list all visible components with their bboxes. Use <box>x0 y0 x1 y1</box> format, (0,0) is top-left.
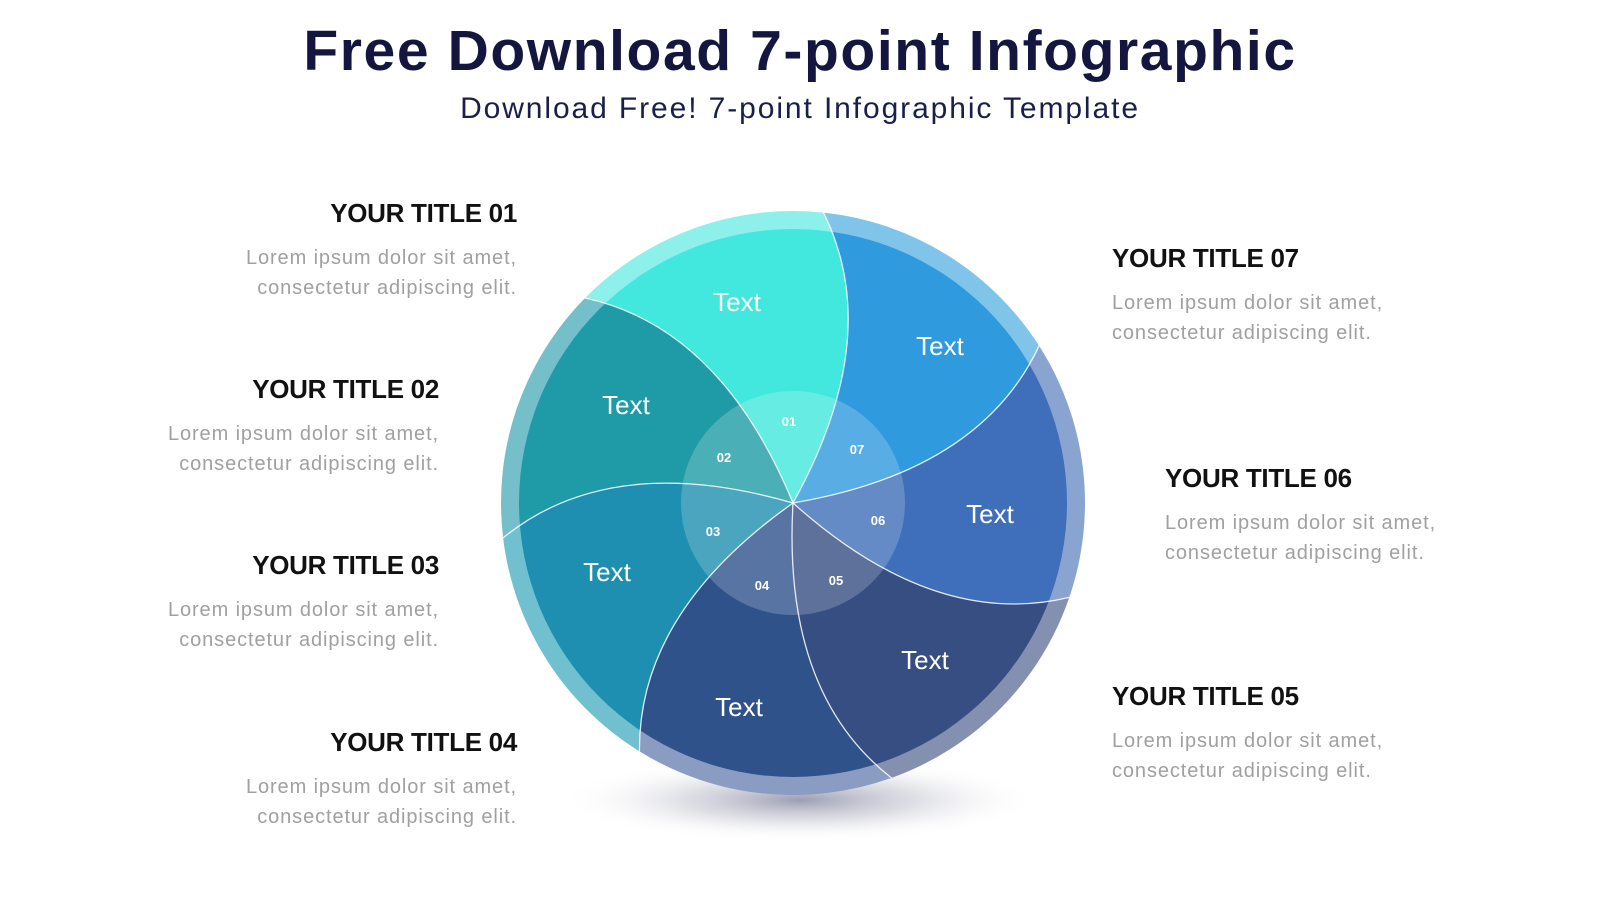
text block: title 02: Lorem ipsum dolor sit amet, <box>168 423 439 445</box>
segment labels: Text <box>713 287 762 317</box>
text block: title 04 <box>246 727 518 828</box>
segment numbers: 01 <box>782 414 796 429</box>
segment 01 <box>606 229 848 502</box>
text block: title 04: YOUR TITLE 04 <box>330 727 517 757</box>
text block: title 02 <box>168 374 439 475</box>
segment numbers: 06 <box>871 513 885 528</box>
text block: title 07: consectetur adipiscing elit. <box>1112 322 1372 344</box>
text block: title 05: Lorem ipsum dolor sit amet, <box>1112 730 1383 752</box>
subtitle: Download Free! 7-point Infographic Template <box>460 92 1140 125</box>
segment labels: Text <box>583 557 632 587</box>
segment 04 <box>640 504 876 777</box>
text block: title 06: consectetur adipiscing elit. <box>1165 542 1425 564</box>
rim segments <box>501 211 1085 795</box>
text block: title 03: Lorem ipsum dolor sit amet, <box>168 599 439 621</box>
segment labels: Text <box>602 390 651 420</box>
shadow <box>560 758 1040 842</box>
text block: title 07 <box>1112 243 1383 344</box>
segment 03 <box>520 483 792 730</box>
segment numbers: 04 <box>755 578 770 593</box>
main segments <box>519 229 1067 777</box>
text block: title 05: YOUR TITLE 05 <box>1112 681 1299 711</box>
segment labels: Text <box>966 499 1015 529</box>
boundary lines <box>503 213 1069 778</box>
segment 02 <box>519 304 792 525</box>
segment numbers <box>706 414 885 593</box>
inner circle overlay <box>681 391 905 615</box>
segment labels <box>583 287 1015 722</box>
segment numbers: 02 <box>717 450 731 465</box>
segment labels: Text <box>901 645 950 675</box>
text block: title 05 <box>1112 681 1383 782</box>
segment 07 <box>794 232 1029 502</box>
text block: title 02: consectetur adipiscing elit. <box>179 453 439 475</box>
text block: title 07: YOUR TITLE 07 <box>1112 243 1299 273</box>
text block: title 04: Lorem ipsum dolor sit amet, <box>246 776 517 798</box>
text block: title 07: Lorem ipsum dolor sit amet, <box>1112 292 1383 314</box>
text block: title 06 <box>1165 463 1436 564</box>
segment numbers: 05 <box>829 573 843 588</box>
title: Free Download 7-point Infographic <box>303 19 1297 83</box>
text block: title 03: YOUR TITLE 03 <box>252 550 439 580</box>
segment numbers: 07 <box>850 442 864 457</box>
segment 05 <box>792 504 1048 764</box>
segment labels: Text <box>715 692 764 722</box>
text block: title 01 <box>246 198 517 299</box>
text block: title 06: Lorem ipsum dolor sit amet, <box>1165 512 1436 534</box>
text block: title 04: consectetur adipiscing elit. <box>257 806 517 828</box>
chart: pinwheel circle <box>501 211 1085 831</box>
segment 06 <box>794 365 1067 604</box>
text block: title 01: Lorem ipsum dolor sit amet, <box>246 247 517 269</box>
segment labels: Text <box>916 331 965 361</box>
text block: title 01: YOUR TITLE 01 <box>330 198 517 228</box>
text block: title 01: consectetur adipiscing elit. <box>257 277 517 299</box>
segment numbers: 03 <box>706 524 720 539</box>
text block: title 03 <box>168 550 439 651</box>
text block: title 03: consectetur adipiscing elit. <box>179 629 439 651</box>
text block: title 02: YOUR TITLE 02 <box>252 374 439 404</box>
text block: title 06: YOUR TITLE 06 <box>1165 463 1352 493</box>
text block: title 05: consectetur adipiscing elit. <box>1112 760 1372 782</box>
